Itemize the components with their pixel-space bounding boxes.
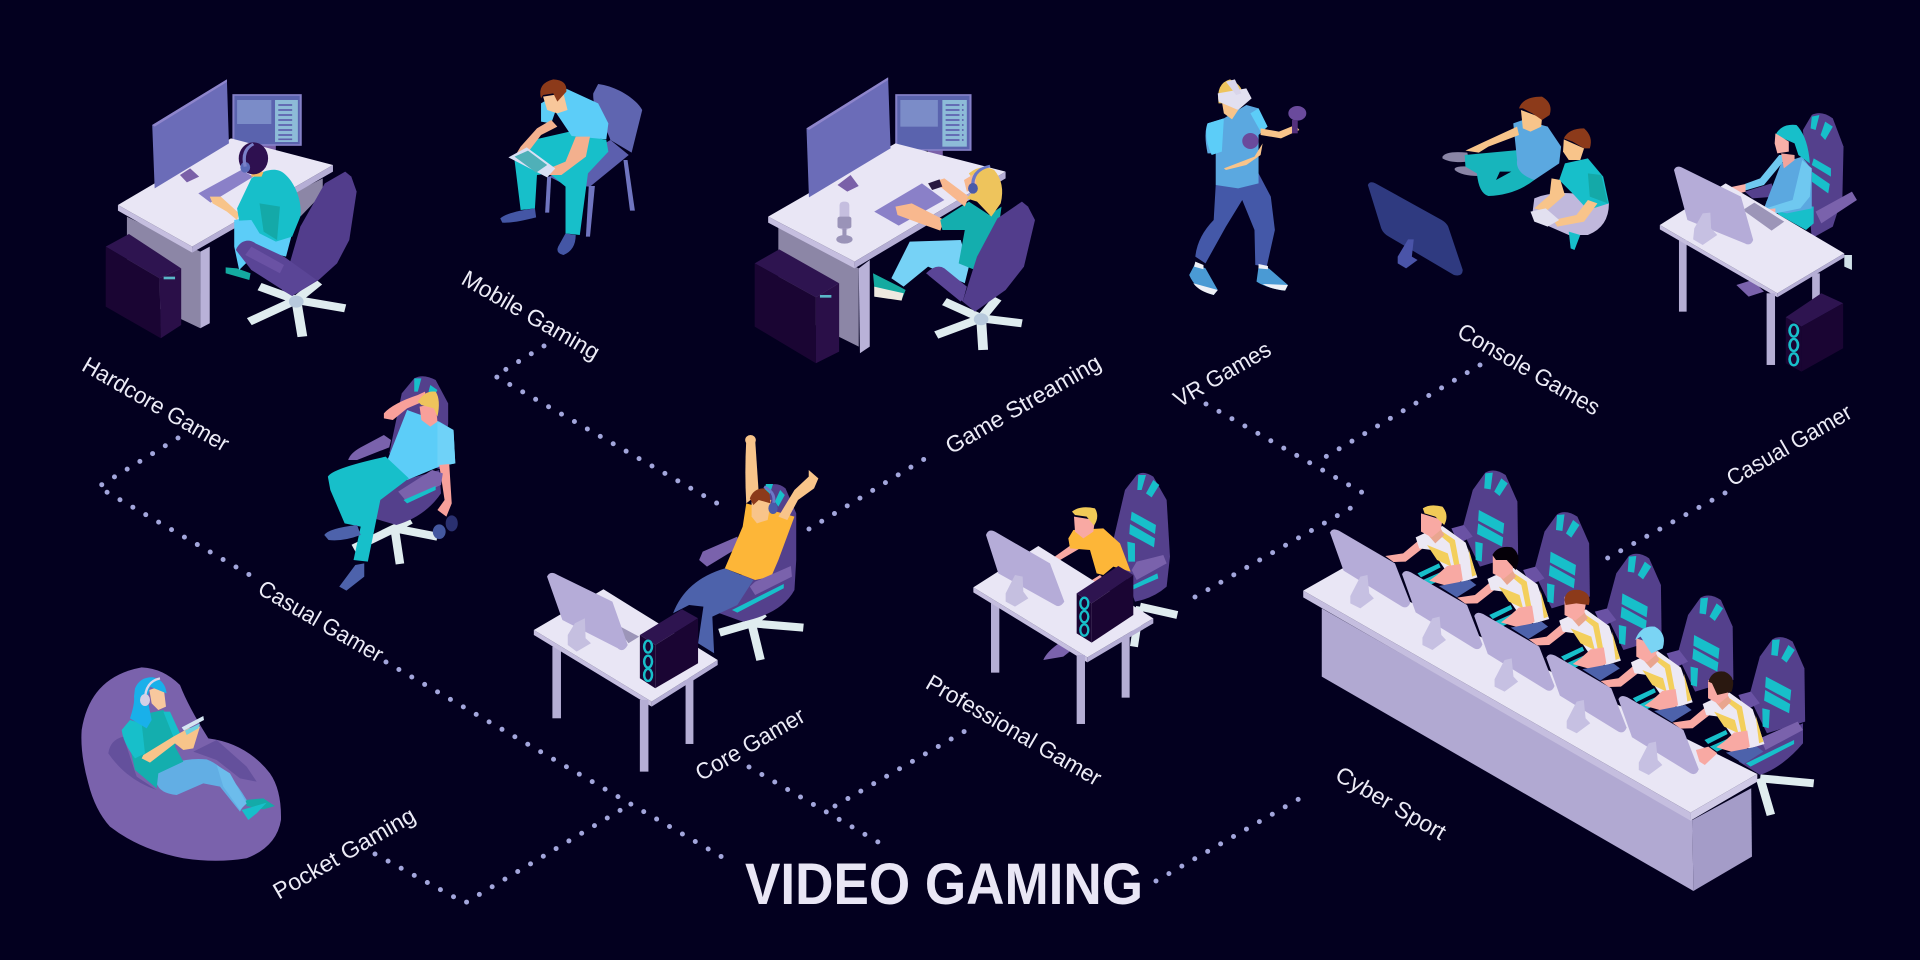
label: Game Streaming: Game Streaming (941, 349, 1105, 459)
long desk (1303, 568, 1757, 891)
microphone (836, 202, 853, 244)
gamer figure (210, 142, 301, 280)
label: Mobile Gaming: Mobile Gaming (457, 265, 605, 365)
desk top (768, 143, 1006, 268)
scene: pocket gaming on bean bag (81, 667, 281, 861)
boy one (1442, 97, 1561, 196)
scene: professional gamer (973, 473, 1177, 724)
legs (1195, 173, 1275, 267)
chair armrest (398, 470, 443, 503)
chair base (1760, 778, 1814, 815)
desk (973, 546, 1153, 724)
main monitor (152, 79, 229, 188)
streamer chair (926, 202, 1035, 350)
chair (1745, 113, 1857, 238)
label: VR Games: VR Games (1169, 336, 1275, 412)
label: Pocket Gaming: Pocket Gaming (268, 802, 420, 904)
figure (1040, 507, 1131, 660)
title: VIDEO GAMING (745, 852, 1143, 917)
dotted connector lines (98, 346, 1725, 903)
desk (1660, 183, 1852, 365)
torso (1206, 105, 1268, 188)
tower (640, 609, 698, 688)
desk top (118, 138, 333, 253)
tower (1077, 566, 1133, 643)
label: Cyber Sport: Cyber Sport (1331, 761, 1451, 845)
second monitor (896, 95, 971, 165)
desk legs (778, 227, 870, 353)
chair (699, 484, 803, 660)
label: Hardcore Gamer: Hardcore Gamer (78, 351, 234, 457)
keyboard (874, 183, 944, 226)
scene: game streaming (755, 77, 1035, 363)
bean bag (81, 667, 281, 861)
scene: casual gamer woman at desk (1660, 113, 1857, 372)
chair (545, 84, 642, 237)
figure (122, 677, 275, 820)
tower (755, 249, 839, 363)
streamer figure (873, 166, 1002, 301)
monitor (1674, 167, 1753, 245)
desk (534, 589, 718, 772)
figure (673, 435, 818, 653)
monitor (547, 573, 639, 652)
label: Casual Gamer (left): Casual Gamer (254, 575, 388, 667)
monitor (986, 531, 1064, 607)
label: Casual Gamer (right): Casual Gamer (1722, 399, 1856, 491)
scene: console games (1368, 97, 1609, 276)
scene: core gamer (534, 435, 818, 772)
team monitors (1330, 529, 1717, 775)
team players (1385, 505, 1764, 764)
tower (106, 234, 181, 338)
shoes (500, 208, 576, 255)
chair (348, 376, 448, 564)
gamer chair (236, 172, 357, 337)
figure (324, 391, 455, 591)
scene: mobile gaming (500, 79, 642, 255)
label: Professional Gamer: Professional Gamer (922, 669, 1107, 791)
main monitor (806, 77, 891, 197)
desk legs (127, 178, 323, 328)
arms (1224, 125, 1299, 170)
scene: hardcore gamer at desk (106, 79, 357, 338)
shoes (1189, 262, 1288, 295)
scene: VR games (1189, 79, 1306, 295)
woman figure (1725, 125, 1814, 230)
keyboard (1743, 203, 1784, 231)
chair (1113, 473, 1177, 647)
boy two (1530, 128, 1609, 250)
label: Core Gamer: Core Gamer (691, 702, 810, 786)
TV (1368, 182, 1463, 276)
headphones (433, 515, 458, 539)
team chairs (1417, 470, 1805, 775)
tower (1786, 293, 1843, 372)
chair armrest (732, 566, 792, 613)
figure (508, 79, 608, 235)
label: Console Games: Console Games (1453, 318, 1605, 420)
keyboard (198, 170, 253, 203)
scene: casual gamer relaxing in chair (324, 376, 458, 591)
head and headset (1218, 79, 1252, 119)
scene: cyber sport team (1303, 470, 1814, 891)
VR controllers (1242, 106, 1306, 149)
second monitor (233, 95, 301, 158)
